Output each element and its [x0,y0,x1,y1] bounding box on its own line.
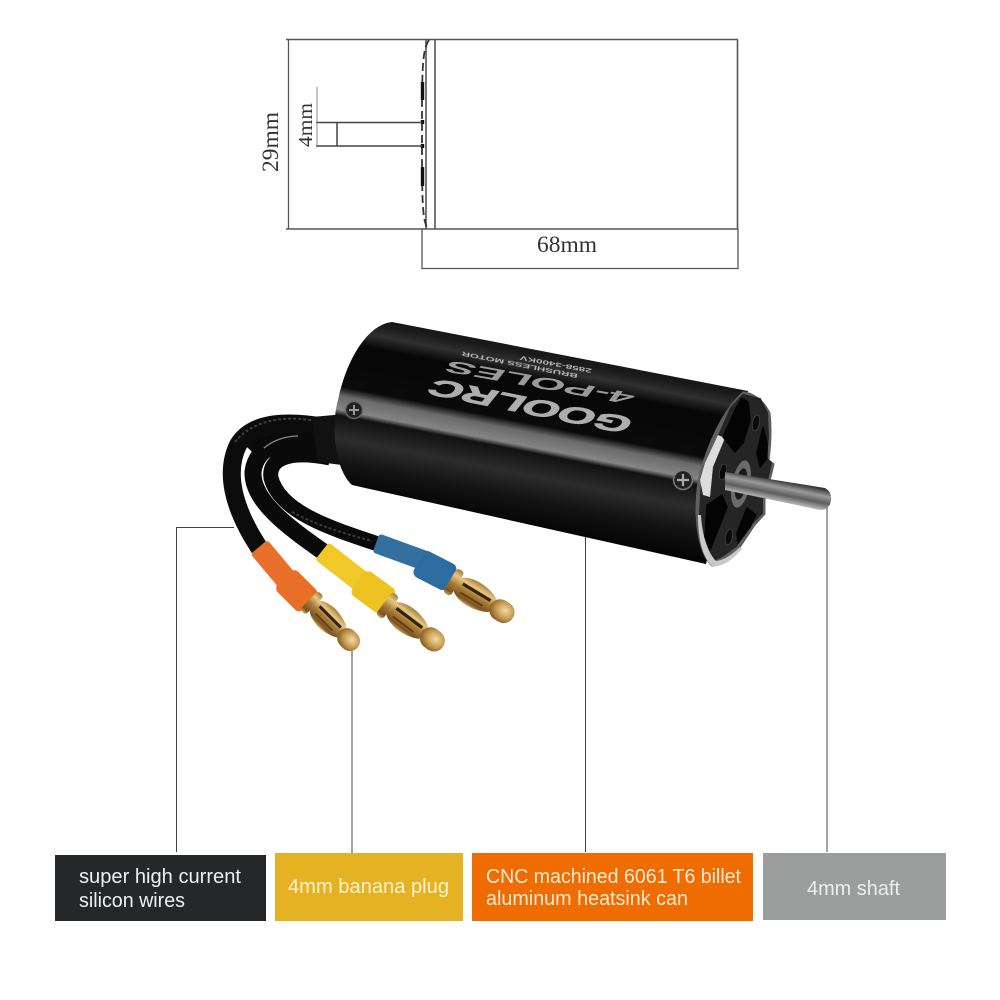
wire bundle filler [242,420,320,458]
label: silicon wires [55,855,266,921]
heat shrink at motor [312,414,350,466]
yellow sleeve narrow [315,542,373,594]
29mm dimension line [288,40,290,229]
68mm label: 68mm [537,232,597,257]
screw left [346,402,362,418]
front plate [422,40,429,229]
label: heatsink can [472,853,753,921]
label: heatsink can: CNC machined 6061 T6 billet [486,866,741,888]
orange sleeve wide [274,568,320,614]
lower silver rim [698,515,742,566]
blue banana plug [443,568,520,630]
orange connector [251,540,366,657]
29mm label: 29mm [258,112,283,172]
motor end face [696,392,774,566]
label: shaft [763,853,946,920]
dimension drawing [258,40,738,268]
screw holes [718,414,761,546]
68mm dimension lines [422,229,738,268]
yellow connector [315,542,451,658]
label: silicon wires: super high current [79,866,241,888]
shaft outline [316,122,422,146]
label: banana plug: 4mm banana plug [288,876,449,898]
orange sleeve narrow [251,540,301,594]
bearing [728,459,754,509]
wire to blue plug [271,455,378,544]
wire to orange plug [232,423,325,552]
blue connector [373,534,520,630]
blue sleeve narrow [373,534,432,572]
motor outline side view [286,40,738,229]
leader lines [176,505,827,854]
logo text GOOLRC: GOOLRC [421,374,640,437]
yellow banana plug [376,592,451,658]
label: silicon wires: silicon wires [79,890,185,912]
4mm extension line [316,87,318,146]
label: heatsink can: aluminum heatsink can [486,888,688,910]
logo text 4-POLES: 4-POLES [440,357,640,407]
face plate [700,395,771,560]
motor wires [232,414,378,553]
4mm label: 4mm [295,103,317,147]
silver rim crescent [700,435,725,497]
orange banana plug [300,591,366,657]
model text: 2858-3400KV [519,354,592,373]
vents [705,398,767,550]
yellow sleeve wide [349,569,398,615]
label: shaft: 4mm shaft [807,878,900,900]
brushless motor text: BRUSHLESS MOTOR [460,349,578,378]
motor shaft [725,472,831,510]
label: banana plug [275,853,463,921]
motor can [335,322,748,564]
wire to yellow plug [253,441,325,553]
rim edge [696,392,774,566]
blue sleeve wide [411,549,458,592]
screw right [674,470,692,490]
